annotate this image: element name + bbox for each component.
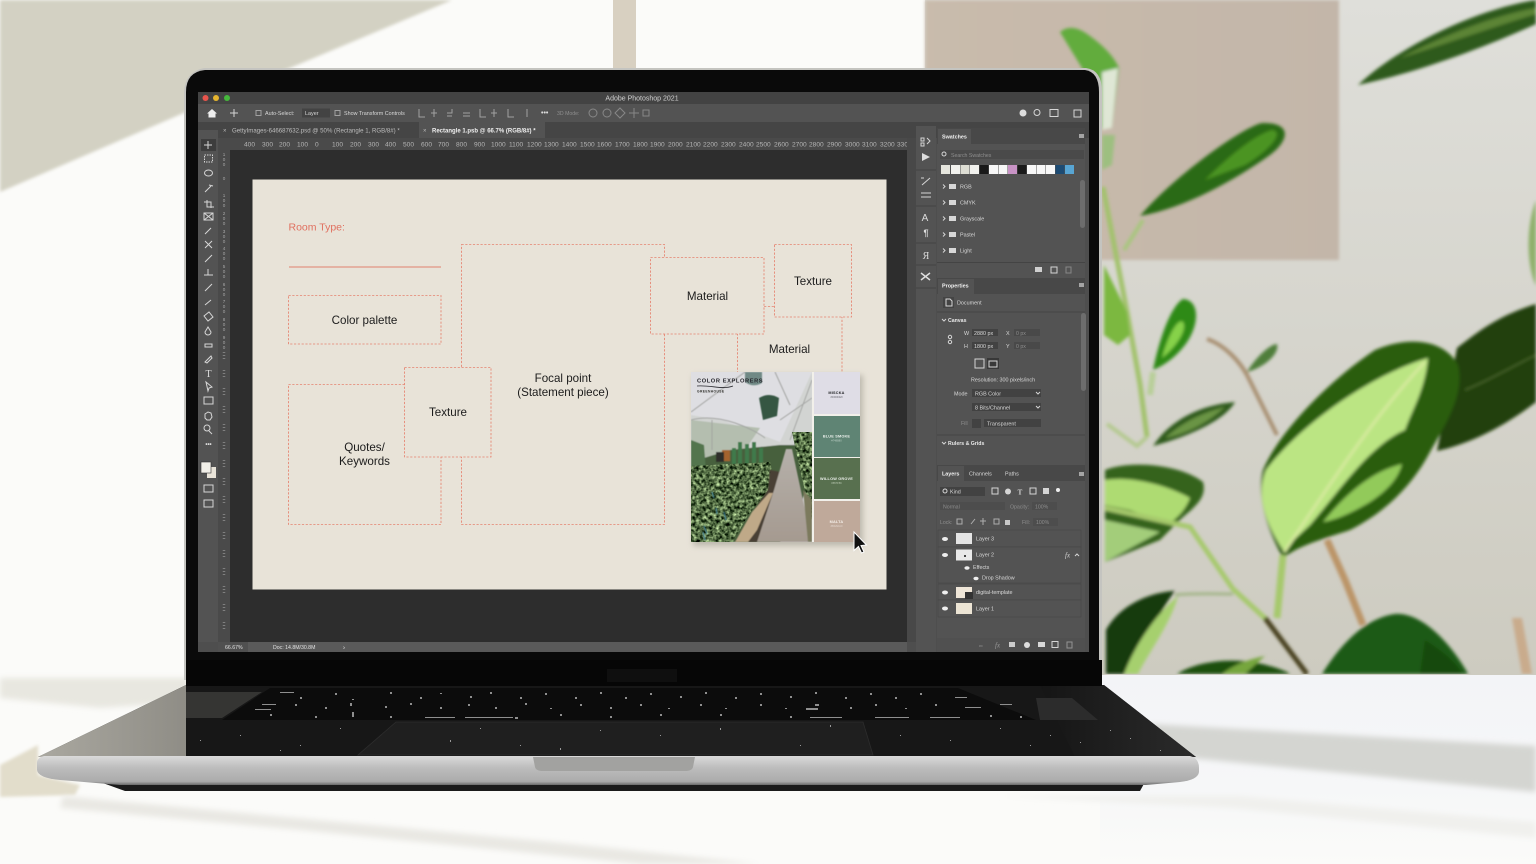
rulers: 600 [222, 282, 226, 297]
lower left leaf [1105, 465, 1204, 562]
panel: properties: 0 px [1016, 331, 1026, 337]
panel: properties: 1800 px [974, 344, 993, 350]
photo brand label [697, 378, 763, 394]
bottom middle leaf [1177, 661, 1290, 674]
laptop base [37, 685, 1199, 791]
title bar [198, 92, 1089, 104]
layer rows: fx [1065, 552, 1071, 560]
swatch: mischka: MISCKA [828, 391, 845, 395]
panel: properties: Document [957, 300, 982, 306]
rulers: 2700 [792, 142, 807, 148]
rulers: 500 [222, 264, 226, 279]
rulers: 900 [474, 142, 485, 148]
rulers: 100 [297, 142, 308, 148]
layer rows: digital-template [976, 590, 1013, 596]
left tools panel [198, 130, 218, 642]
rulers: 1800 [633, 142, 648, 148]
rulers: 1900 [650, 142, 665, 148]
options bar: Show Transform Controls [344, 111, 405, 117]
plant with blurred leaves [1060, 0, 1536, 674]
rulers: 2800 [809, 142, 824, 148]
screen: Photoshop window [198, 92, 1089, 652]
panel: properties: Mode [954, 392, 968, 398]
keyboard [222, 688, 1036, 720]
options bar: ••• [541, 110, 549, 117]
rulers: 300 [222, 229, 226, 244]
rulers: 3000 [845, 142, 860, 148]
panel: properties: Transparent [987, 422, 1016, 428]
under shadow [100, 782, 1145, 791]
layer rows: Layer 3 [976, 536, 994, 542]
document canvas area [230, 138, 916, 642]
swatch row [941, 165, 1074, 174]
rulers: 100 [332, 142, 343, 148]
rulers [218, 138, 908, 642]
box: texture left: Texture [429, 406, 467, 419]
lower twig [1327, 540, 1363, 625]
panel: properties [937, 278, 1086, 464]
blend row: Lock: [940, 520, 952, 526]
blend row: 100% [1036, 520, 1050, 526]
right dark leaf [1437, 304, 1536, 451]
dust specks [200, 725, 1161, 751]
rulers: 1700 [615, 142, 630, 148]
rulers: 200 [350, 142, 361, 148]
rulers: 300 [368, 142, 379, 148]
document tabs: × [423, 128, 427, 134]
swatch folders: Pastel [960, 232, 975, 238]
collapsed dock icons: A [922, 213, 929, 224]
title bar: Adobe Photoshop 2021 [605, 96, 679, 102]
photo brand label: GREENHOUSE [697, 390, 725, 394]
rulers: 2400 [739, 142, 754, 148]
blend row [940, 502, 1058, 526]
rulers: 800 [456, 142, 467, 148]
rulers: 1000 [491, 142, 506, 148]
document tabs [198, 122, 1089, 138]
swatch: blue smoke [814, 416, 860, 457]
rulers: 500 [403, 142, 414, 148]
rulers: 200 [222, 211, 226, 226]
layer footer: ∞ [979, 644, 983, 650]
status bar: Doc: 14.8M/30.8M [273, 645, 315, 651]
left tools panel: ••• [205, 442, 212, 448]
table surface with shadows [60, 675, 1536, 864]
swatch folders: Light [960, 248, 972, 254]
rulers: 400 [385, 142, 396, 148]
twig [1207, 339, 1277, 435]
right edge leaf [1528, 200, 1536, 286]
panel: properties: Canvas [948, 318, 967, 324]
panel: properties: Properties [942, 284, 969, 290]
layer filter row: T [1018, 488, 1023, 496]
bottom right leaf [1322, 614, 1468, 674]
rulers: 330 [897, 142, 908, 148]
rulers: 700 [222, 299, 226, 314]
rulers: 100 [222, 193, 226, 208]
rulers: 1600 [597, 142, 612, 148]
box: color palette [288, 296, 441, 344]
layer rows [938, 530, 1081, 617]
bottom left leaf [1106, 591, 1175, 674]
moodboard artboard [252, 180, 886, 590]
room type underline [289, 266, 441, 268]
rulers: 1300 [544, 142, 559, 148]
blend row: 100% [1035, 504, 1049, 510]
panel: layers [937, 464, 1085, 652]
layer footer: fx [995, 642, 1001, 650]
swatch: willow grove: #657F59 [831, 481, 842, 485]
panel: properties: Y [1006, 344, 1010, 350]
box: texture left [404, 368, 491, 457]
blend row: Normal [943, 504, 960, 510]
box: focal point [462, 244, 664, 524]
document tabs: Rectangle 1.psb @ 66.7% (RGB/8#) * [432, 128, 536, 134]
top leaf behind lid [1060, 28, 1119, 128]
box: material upper [650, 258, 764, 334]
panel: properties: 8 Bits/Channel [975, 406, 1010, 412]
cacti texture [691, 462, 775, 542]
swatch folders: CMYK [960, 200, 976, 206]
left tools panel: T [205, 369, 212, 380]
status bar: › [343, 646, 345, 652]
rulers: 300 [262, 142, 273, 148]
rulers: 1100 [509, 142, 524, 148]
box: quotes and keywords: Keywords [339, 455, 390, 468]
rulers: 1500 [580, 142, 595, 148]
options bar: 3D Mode: [557, 111, 580, 117]
document tabs: GettyImages-646687632.psd @ 50% (Rectangle 1, RGB/8#) * [232, 128, 400, 134]
panel: layers: Paths [1005, 472, 1019, 478]
panel: properties: 2880 px [974, 331, 993, 337]
box: material lower: Material [769, 343, 810, 356]
panel: swatches: Swatches [942, 134, 967, 140]
swatch: malta: #BDADA0 [831, 524, 843, 528]
rulers: 2100 [686, 142, 701, 148]
swatch folders [943, 184, 984, 254]
box: focal point: Focal point [535, 372, 592, 385]
box: quotes and keywords [288, 384, 441, 524]
rulers: 2000 [668, 142, 683, 148]
options bar: Auto-Select: [265, 111, 294, 117]
layer rows: Layer 2 [976, 552, 994, 558]
panel: properties: Resolution: 300 pixels/inch [971, 378, 1035, 384]
rulers: 2500 [756, 142, 771, 148]
layer filter row: Kind [950, 490, 961, 496]
rulers: 2600 [774, 142, 789, 148]
panel: swatches [937, 128, 1085, 278]
swatch: mischka: #DDDDE8 [830, 395, 843, 399]
rulers: 200 [279, 142, 290, 148]
rulers: 2200 [703, 142, 718, 148]
laptop lid and bezel [184, 68, 1102, 686]
collapsed dock icons [916, 126, 936, 652]
rulers: 3200 [880, 142, 895, 148]
box: texture right: Texture [794, 275, 832, 288]
swatch: mischka [814, 372, 860, 414]
rulers: 2300 [721, 142, 736, 148]
slim dark leaf [1153, 402, 1235, 446]
swatch folders: Grayscale [960, 216, 984, 222]
box: focal point: (Statement piece) [517, 386, 609, 399]
main big leaf [1261, 342, 1459, 558]
small bright leaf [1153, 299, 1196, 370]
swatch: blue smoke: BLUE SMOKE [823, 434, 850, 438]
rulers: 3100 [862, 142, 877, 148]
box: material upper: Material [687, 290, 728, 303]
layer footer [937, 638, 1085, 652]
options bar: Layer [305, 111, 319, 117]
rulers: 1400 [562, 142, 577, 148]
swatch: willow grove: WILLOW GROVE [820, 477, 853, 481]
blend row: Fill: [1022, 520, 1030, 526]
swatch search: Search Swatches [951, 153, 992, 159]
rulers: 400 [222, 246, 226, 261]
swatch: malta: MALTA [830, 520, 843, 524]
swatch search [940, 150, 1084, 159]
collapsed dock icons: Я [923, 251, 930, 262]
keyboard deck [38, 685, 1196, 757]
panel: layers: Channels [969, 472, 992, 478]
box: color palette: Color palette [332, 314, 397, 327]
heading: room type: Room Type: [288, 222, 345, 234]
box: texture right [774, 244, 852, 317]
collapsed dock icons: ¶ [923, 228, 929, 238]
panel: properties: RGB Color [975, 392, 1001, 398]
rulers: 1200 [527, 142, 542, 148]
trackpad [358, 722, 873, 755]
panel: properties: X [1006, 331, 1010, 337]
layer rows: Effects [973, 565, 990, 571]
leaf top right [1358, 0, 1536, 85]
rulers: 0 [222, 176, 226, 181]
blend row: Opacity: [1010, 504, 1029, 510]
placed template: greenhouse color palette [691, 372, 863, 546]
panel: properties: Fill [961, 421, 968, 427]
thumb notch [533, 757, 695, 771]
box: material lower [738, 306, 842, 406]
photo brand label: COLOR EXPLORERS [697, 378, 763, 384]
rulers: 900 [222, 335, 226, 350]
panel: properties: Rulers & Grids [948, 441, 984, 447]
status bar [218, 642, 907, 652]
leaf upper middle [1140, 123, 1285, 216]
options bar [198, 104, 1089, 122]
swatch folders: RGB [960, 184, 972, 190]
rulers: 2900 [827, 142, 842, 148]
panel: properties: H [964, 344, 968, 350]
layer filter row [940, 487, 1060, 496]
box: quotes and keywords: Quotes/ [344, 441, 386, 454]
panel: properties: 0 px [1016, 344, 1026, 350]
greenhouse photo [691, 372, 812, 542]
swatch: malta [814, 501, 860, 542]
rulers: 800 [222, 317, 226, 332]
far right twig [1512, 618, 1532, 674]
swatch: blue smoke: #748B80 [831, 438, 842, 442]
panel: layers: Layers [942, 472, 959, 478]
layer rows: Drop Shadow [982, 576, 1015, 582]
rulers: 0 [315, 142, 319, 148]
status bar: 66.67% [225, 645, 243, 651]
upper stem [1103, 187, 1147, 437]
document tabs: × [223, 128, 227, 134]
rulers: 600 [421, 142, 432, 148]
swatch: willow grove [814, 458, 860, 499]
rulers: 700 [438, 142, 449, 148]
rulers: 400 [244, 142, 255, 148]
icon: mouse cursor [854, 532, 866, 553]
front edge [37, 756, 1199, 785]
panel: properties: W [964, 331, 970, 337]
layer rows: Layer 1 [976, 606, 994, 612]
rulers: 100 [222, 152, 226, 167]
